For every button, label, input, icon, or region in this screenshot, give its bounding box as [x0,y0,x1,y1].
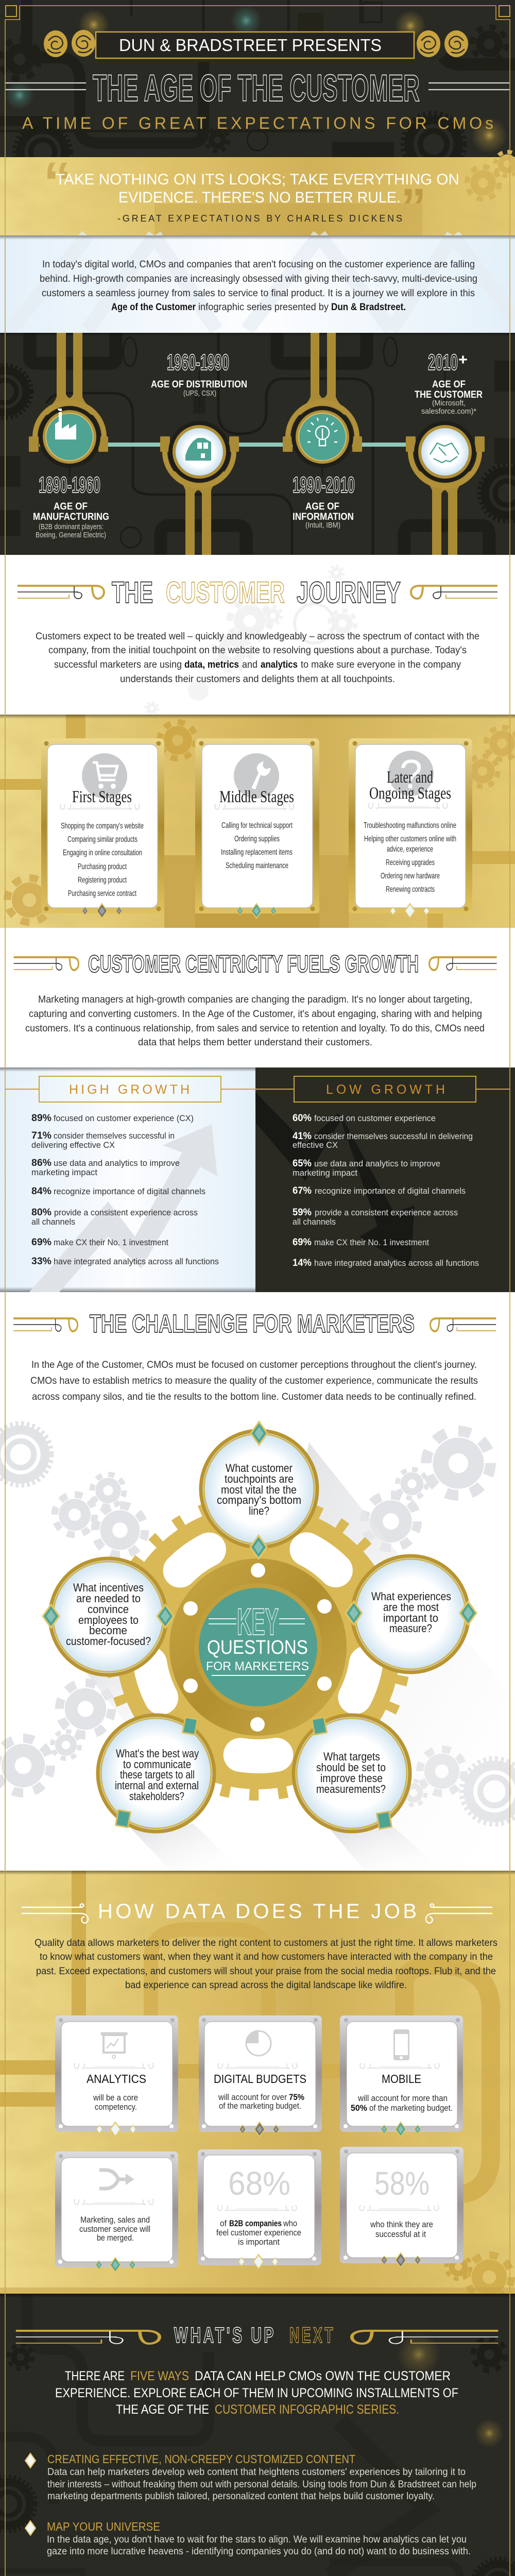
item: creating effective content [25,2452,476,2502]
panel: how data does the job [0,1871,515,2299]
medallion: question right: are the most [383,1601,439,1614]
card: 68 percent: B2B companies [229,2218,282,2228]
data text: to know what customers want, when they want it and how customers have interacted with the company in the [40,1952,493,1962]
icon: train [185,438,211,461]
medallion: question bottom left: these targets to all [120,1768,195,1781]
low growth stats: use data and analytics to improve [314,1159,440,1168]
lead paragraph [55,2369,458,2417]
card: 68 percent: who [283,2218,297,2228]
icon: up arrow [29,1124,217,1292]
list of activities: Shopping the company's website [61,822,144,831]
quote text [56,171,459,206]
key questions label [206,1601,309,1676]
centricity text: Marketing managers at high-growth companies are changing the paradigm. It's no longer about targeting, [38,994,472,1005]
teal connecting line [39,443,474,447]
list of activities: Purchasing product [78,862,127,871]
low growth stats: all channels [293,1217,336,1227]
panel: header dark background [0,0,515,180]
medallion: question left: customer-focused? [66,1635,151,1648]
list of activities [61,822,144,898]
background gears [0,1423,515,1824]
low growth stats: 65% [293,1158,312,1169]
card: merged [55,2151,178,2272]
list of activities: Helping other customers online with [364,835,456,843]
year: 2010+: 2010 [428,350,458,375]
journey text: analytics [261,659,298,670]
key questions label: QUESTIONS [207,1637,308,1658]
list of activities: Scheduling maintenance [226,861,288,870]
card: 68 percent: feel customer experience [216,2228,301,2238]
challenge text: across company silos, and tie the results to the bottom line. Customer data needs to be continually refined. [32,1392,476,1402]
card: mobile: 50% [351,2103,367,2113]
lead paragraph: DATA CAN HELP CMOs OWN THE CUSTOMER [195,2369,451,2383]
icon: handshake [430,443,459,463]
high growth title box [5,1076,255,1102]
card title: Middle Stages [219,788,294,806]
panel: customer journey [0,555,515,715]
icon: pie chart [246,2031,271,2056]
challenge text: In the Age of the Customer, CMOs must be focused on customer perceptions throughout the client's journey. [31,1360,477,1370]
label: age of the customer: (Microsoft, [432,399,466,408]
key questions label: KEY [237,1601,279,1643]
lead paragraph: THE AGE OF THE [116,2402,209,2417]
background pipes [0,1871,491,2194]
medallion 2: distribution [160,421,239,555]
centricity text: capturing and converting customers. In the Age of the Customer, it's about engaging, sharing with and helping [29,1009,482,1020]
card: digital budgets: DIGITAL BUDGETS [214,2072,306,2086]
medallion: question bottom right: improve these [320,1772,383,1785]
card: 68 percent [198,2149,321,2269]
low growth title box [255,1076,510,1102]
list of activities: Purchasing service contract [68,889,136,898]
list of activities: Ordering supplies [234,835,280,843]
list of activities [221,821,293,870]
card: merged: customer service will [79,2224,150,2234]
icon: question mark [388,751,434,797]
medallion: question left: convince [88,1603,129,1616]
heading: how data does the job: HOW DATA DOES THE JOB [98,1900,417,1923]
intro text: In today's digital world, CMOs and companies that aren't focusing on the customer experience are falling [42,259,475,270]
low growth stats: 14% [293,1258,312,1268]
high growth stats: make CX their No. 1 investment [54,1238,168,1247]
panel: introduction [0,235,515,333]
label: age of the customer: THE CUSTOMER [415,389,483,400]
list of activities: Comparing similar products [67,835,138,844]
medallion: question bottom left: What's the best way [116,1747,199,1760]
card: later and ongoing stages [349,738,472,918]
label: age of manufacturing [33,501,109,539]
card: digital budgets [199,2015,322,2137]
icon: gems [390,904,430,918]
medallion: question left: What incentives [73,1581,144,1594]
central gear [111,1500,405,1794]
intro text: customers a seamless journey from sales to service to final product. It is a journey we will explore in this [42,288,475,299]
list of activities: Renewing contracts [386,885,435,894]
icon: question mark: ? [400,751,422,797]
year: 2010+: + [458,351,468,368]
panel: timeline [0,333,515,555]
label: age of manufacturing: (B2B dominant players: [39,522,104,531]
card title: Ongoing Stages [369,784,451,803]
card: 58 percent: 58% [374,2165,430,2202]
low growth stats: provide a consistent experience across [315,1208,458,1217]
low growth title box: LOW GROWTH [326,1082,445,1097]
intro text: Age of the Customer [111,302,196,313]
low growth stats: 60% [293,1113,312,1124]
card title [369,768,451,803]
label: age of information: INFORMATION [293,512,354,522]
heading: how data does the job [22,1900,492,1923]
list of activities: Installing replacement items [221,848,293,857]
card: analytics: will be a core [93,2093,138,2103]
list of activities: Receiving upgrades [386,858,435,867]
low growth stats: consider themselves successful in delivering [314,1131,473,1141]
card: 68 percent: of [220,2218,227,2228]
heading: what's up next [16,2323,498,2348]
icon: gems [237,904,276,918]
high growth stats: provide a consistent experience across [54,1208,198,1217]
low growth stats: focused on customer experience [314,1113,436,1123]
item: map your universe: gaze into more lucrative heavens - identifying companies you do (and do not) want to do business with. [47,2546,471,2557]
intro text: infographic series presented by [198,302,329,313]
list of activities: Troubleshooting malfunctions online [364,821,456,830]
label: age of the customer: AGE OF [432,379,466,390]
medallion: question left: employees to [78,1614,139,1626]
label: age of distribution [151,379,247,398]
quote text: EVIDENCE. THERE'S NO BETTER RULE. [118,189,401,206]
panel: high growth [0,1067,255,1292]
card: mobile: MOBILE [382,2072,421,2086]
medallion: question right: What experiences [371,1590,451,1603]
card: mobile: will account for more than [357,2093,448,2103]
medallion: question right: measure? [389,1622,432,1635]
medallion: question top: line? [249,1504,269,1517]
journey text: successful marketers are using [54,659,182,670]
medallion: question bottom right [294,1715,410,1832]
high growth stats: consider themselves successful in [54,1131,175,1141]
medallion: question top: most vital the the [221,1483,297,1496]
high growth stats: marketing impact [31,1167,97,1177]
list of activities: Registering product [78,876,127,885]
year: 1960-1990: 1960-1990 [167,350,229,375]
medallion: question bottom right: measurements? [316,1783,386,1795]
banner: Dun and Bradstreet presents [44,30,468,58]
medallion: question left [43,1558,174,1675]
data text [35,1938,497,1991]
icon: gems [82,904,122,918]
label: age of manufacturing: MANUFACTURING [33,512,109,522]
quote text: TAKE NOTHING ON ITS LOOKS; TAKE EVERYTHING ON [56,171,459,188]
low growth stats: marketing impact [293,1168,357,1178]
medallion 1: manufacturing [29,333,108,468]
item: map your universe: In the data age, you don't have to wait for the stars to align. We will examine how analytics can let you [47,2534,467,2545]
heading: the customer journey: CUSTOMER [166,576,285,609]
card: merged: Marketing, sales and [80,2215,150,2225]
high growth stats: all channels [31,1217,75,1227]
medallion: question top: touchpoints are [225,1472,294,1485]
high growth stats: 86% [31,1158,52,1168]
heading: the customer journey [18,576,497,609]
journey text: data, metrics [184,659,239,670]
card: middle stages [195,738,319,918]
item: map your universe: MAP YOUR UNIVERSE [47,2520,160,2533]
medallion: question bottom left [98,1715,214,1832]
high growth stats: delivering effective CX [31,1140,115,1150]
low growth stats [293,1113,479,1268]
label: age of manufacturing: AGE OF [54,501,88,512]
low growth stats: 67% [293,1185,312,1196]
icon: wrench [234,753,279,799]
card: merged: be merged. [97,2233,134,2243]
list of activities [364,821,456,894]
centricity text: data that helps them better understand their customers. [138,1037,372,1048]
icon: factory [55,409,76,439]
low growth stats: recognize importance of digital channels [315,1186,466,1196]
medallion 4: customer [406,421,485,555]
item: creating effective content: Data can help marketers develop web content that heightens customers' experiences by tailoring it to [47,2467,466,2478]
quote attribution: -GREAT EXPECTATIONS BY CHARLES DICKENS [117,213,402,224]
label: age of the customer: salesforce.com)* [421,407,476,416]
card: digital budgets: of the marketing budget. [219,2101,301,2111]
medallion: question right: important to [383,1612,438,1624]
medallion: question top [201,1422,317,1558]
key questions label: FOR MARKETERS [206,1659,309,1673]
low growth stats: 59% [293,1207,312,1218]
list of activities: Ordering new hardware [381,872,440,880]
high growth stats: 80% [31,1207,52,1218]
medallion: question bottom right: What targets [323,1750,380,1763]
card: mobile [340,2015,463,2137]
intro text: behind. High-growth companies are increasingly obsessed with giving their tech-savvy, multi-device-using [40,274,477,284]
high growth stats: 33% [31,1256,52,1267]
label: age of distribution: (UPS, CSX) [183,389,216,398]
heading: the customer journey: JOURNEY [297,576,401,609]
label: age of distribution: AGE OF DISTRIBUTION [151,379,247,390]
journey text: to make sure everyone in the company [301,659,461,670]
icon: closing quote mark: ” [401,178,426,236]
icon: down arrow [255,1092,415,1268]
panel: quote band [0,151,515,236]
card: 58 percent: successful at it [375,2229,426,2239]
centricity text: customers. It's a continuous relationship, from sales and service to retention and loyalty. To do this, CMOs need [25,1023,485,1034]
journey text: company, from the initial touchpoint on the website to resolving questions about a purchase. Today's [48,645,467,656]
card: 58 percent [340,2147,464,2267]
list of activities: Calling for technical support [221,821,293,830]
year: 1990-2010: 1990-2010 [293,472,355,498]
lead paragraph: EXPERIENCE. EXPLORE EACH OF THEM IN UPCOMING INSTALLMENTS OF [55,2386,458,2400]
label: age of information: AGE OF [305,501,339,512]
panel: low growth [255,1067,515,1292]
panel: challenge for marketers [0,1292,515,1871]
medallion: question bottom left: to communicate [123,1758,191,1771]
medallion: question bottom right: should be set to [316,1761,386,1774]
icon: shopping cart [82,753,127,799]
lead paragraph: THERE ARE [65,2369,125,2383]
low growth stats: have integrated analytics across all functions [314,1258,479,1268]
high growth title box: HIGH GROWTH [69,1082,190,1097]
journey text: understands their customers and delights them at all touchpoints. [120,674,395,685]
high growth stats: 89% [31,1113,52,1124]
medallion: question left: become [89,1624,127,1637]
card: analytics: ANALYTICS [87,2072,146,2086]
card title: First Stages [72,788,132,806]
icon: right ornament [417,30,468,57]
year: 1890-1960: 1890-1960 [39,472,100,498]
challenge text [30,1360,478,1402]
card: digital budgets: will account for over [218,2092,287,2102]
card: 58 percent: who think they are [370,2219,433,2229]
long shadows [88,1443,515,1871]
icon: merging arrows [99,2170,134,2189]
intro text: Dun & Bradstreet. [331,302,406,313]
high growth stats: 84% [31,1186,52,1197]
medallion: question left: are needed to [76,1592,141,1605]
subtitle: A TIME OF GREAT EXPECTATIONS FOR CMOs [22,114,493,132]
panel: what's up next [0,2294,515,2576]
medallion: question bottom left: stakeholders? [129,1790,184,1803]
card: digital budgets: 75% [289,2092,304,2102]
data text: past. Exceed expectations, and customers will shout your praise from the social media rooftops. Flub it, and the [36,1966,496,1977]
intro text [40,259,477,313]
icon: chart [101,2032,127,2058]
item: map your universe [25,2520,471,2557]
lead paragraph: FIVE WAYS [130,2369,189,2383]
medallion: question right [346,1556,476,1672]
item: creating effective content: CREATING EFFECTIVE, NON-CREEPY CUSTOMIZED CONTENT [47,2452,355,2466]
centricity text [25,994,485,1048]
heading: what's up next: WHAT'S UP [174,2323,276,2348]
card: analytics: competency. [95,2102,137,2112]
heading: what's up next: NEXT [289,2323,335,2348]
high growth stats: focused on customer experience (CX) [54,1113,194,1123]
icon: lightbulb [307,418,337,446]
high growth stats: have integrated analytics across all functions [54,1257,219,1266]
item: creating effective content: marketing departments publish tailored, personalized content that helps build customer loyalty. [47,2491,435,2502]
medallion: question top: company's bottom [217,1494,301,1506]
high growth stats: 71% [31,1130,52,1141]
list of activities: Engaging in online consultation [63,849,142,857]
card: analytics [55,2015,178,2137]
icon: opening quote mark: “ [43,151,72,214]
label: age of information: (Intuit, IBM) [305,521,340,530]
low growth stats: 41% [293,1131,312,1142]
low growth stats: 69% [293,1237,312,1248]
challenge text: CMOs have to establish metrics to measure the quality of the customer experience, communicate the results [30,1376,478,1386]
card: 68 percent: 68% [228,2165,290,2202]
card title: Later and [387,768,433,787]
panel: customer centricity [0,928,515,1067]
label: age of manufacturing: Boeing, General Electric) [36,531,106,539]
data text: bad experience can spread across the digital landscape like wildfire. [125,1980,407,1991]
label: age of information [293,501,354,530]
data text: Quality data allows marketers to deliver the right content to customers at just the right time. It allows marketers [35,1938,497,1948]
item: creating effective content: their interests – without freaking them out with personal details. Using tools from Dun & Bradstreet can help [47,2479,476,2490]
list of activities: advice, experience [387,845,433,854]
journey text: and [242,659,258,670]
journey text: Customers expect to be treated well – quickly and knowledgeably – across the spectrum of contact with the [36,631,479,642]
medallion 3: information [283,333,362,468]
card: 68 percent: is important [238,2237,280,2247]
label: age of the customer [415,379,483,416]
low growth stats: effective CX [293,1140,338,1150]
high growth stats: use data and analytics to improve [54,1158,180,1168]
card: first stages [41,738,164,918]
icon: left ornament [44,30,95,57]
banner: Dun and Bradstreet presents: DUN & BRADSTREET PRESENTS [119,36,382,55]
medallion: question bottom left: internal and external [115,1779,199,1792]
icon: phone [393,2029,409,2060]
medallion: question top: What customer [226,1462,293,1475]
heading: the customer journey: THE [112,576,153,609]
low growth stats: make CX their No. 1 investment [314,1238,429,1247]
high growth stats: recognize importance of digital channels [54,1187,205,1196]
high growth stats [31,1113,219,1267]
lead paragraph: CUSTOMER INFOGRAPHIC SERIES. [215,2402,399,2417]
panel: stages [0,715,515,928]
card: mobile: of the marketing budget. [369,2103,453,2113]
journey text [36,631,479,685]
high growth stats: 69% [31,1237,52,1248]
